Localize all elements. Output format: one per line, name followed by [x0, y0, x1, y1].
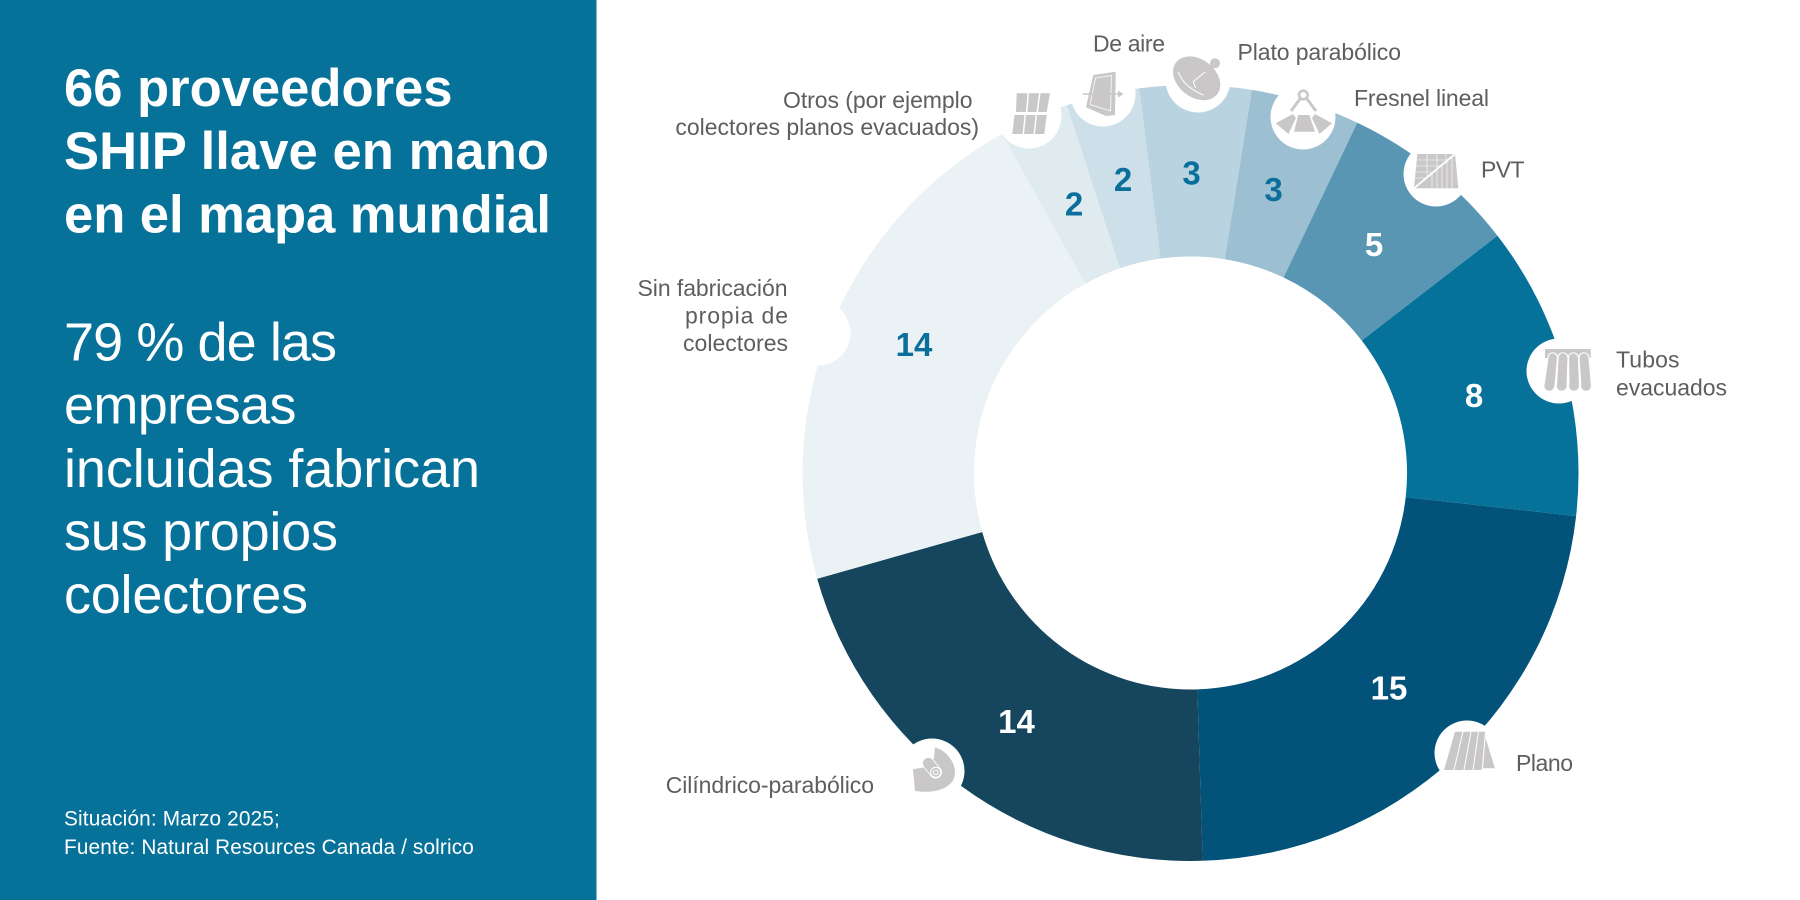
label: PVT: PVT [1481, 157, 1524, 183]
value: Fresnel lineal 3: 3 [1264, 171, 1283, 208]
value: De aire 2: 2 [1114, 161, 1132, 198]
donut chart [803, 85, 1579, 861]
segment: De aire [1067, 88, 1160, 268]
icon: Tubos evacuados [1526, 338, 1592, 404]
value: Plano 15: 15 [1371, 670, 1407, 707]
segment: Otros [1002, 105, 1120, 284]
icon: Fresnel lineal [1270, 84, 1336, 150]
source note: Fuente: Natural Resources Canada / solrico [64, 836, 474, 859]
icon: Plano [1434, 720, 1500, 786]
value: PVT 5: 5 [1365, 226, 1383, 263]
label: Otros: Otros (por ejemplo [783, 87, 972, 113]
label: De aire: De aire [1093, 31, 1165, 57]
segment: PVT [1284, 123, 1498, 341]
value: Tubos evacuados 8: 8 [1465, 377, 1483, 414]
panel: summary [0, 0, 596, 900]
label: Plato parabólico: Plato parabólico [1238, 39, 1401, 65]
label: Otros [675, 87, 979, 140]
segment: Plato parabólico [1139, 85, 1252, 259]
source note: Situación: Marzo 2025; [64, 808, 280, 830]
icon: PVT [1404, 142, 1468, 206]
segment: Sin fabricación propia [803, 134, 1085, 579]
icon: Plato parabólico [1165, 47, 1230, 112]
text block: key finding: 79 % de las [64, 312, 337, 372]
label: Tubos evacuados [1616, 347, 1727, 401]
heading: SHIP llave en mano [64, 122, 549, 181]
label: Otros: colectores planos evacuados) [675, 114, 979, 140]
heading: en el mapa mundial [64, 186, 551, 244]
value: Cilíndrico-parabólico 14: 14 [998, 703, 1035, 740]
label: Sin fabricación propia de colectores [638, 275, 788, 356]
icon: De aire collector [1070, 62, 1136, 126]
segment: Plano [1197, 497, 1576, 861]
notch: Sin fabricación [786, 300, 850, 366]
text block: key finding: sus propios [64, 502, 338, 562]
text block: key finding: colectores [64, 565, 308, 625]
text block: key finding [64, 312, 480, 625]
text block: key finding: empresas [64, 376, 296, 436]
heading: 66 proveedores [64, 59, 452, 118]
icon: Cilíndrico-parabólico [900, 738, 964, 804]
value: Otros 2: 2 [1065, 186, 1083, 222]
label: Tubos evacuados: Tubos [1616, 347, 1680, 373]
source note [64, 808, 474, 859]
label: Tubos evacuados: evacuados [1616, 375, 1727, 401]
label: Sin fabricación propia de colectores: Sin fabricación [638, 275, 788, 301]
value: Plato parabólico 3: 3 [1182, 154, 1201, 192]
label: Sin fabricación propia de colectores: colectores [683, 330, 788, 356]
value: Sin fabricación 14: 14 [896, 326, 933, 363]
label: Cilíndrico-parabólico: Cilíndrico-parabólico [666, 772, 874, 798]
segment: Tubos evacuados [1362, 236, 1579, 516]
text block: key finding: incluidas fabrican [64, 439, 480, 499]
segment: Fresnel lineal [1225, 90, 1357, 278]
label: Plano: Plano [1516, 750, 1573, 776]
label: Fresnel lineal: Fresnel lineal [1354, 85, 1489, 111]
label: Sin fabricación propia de colectores: propia de [685, 302, 788, 328]
icon: Otros collector [996, 84, 1062, 148]
segment: Cilíndrico-parabólico [817, 532, 1203, 861]
heading [64, 59, 551, 244]
